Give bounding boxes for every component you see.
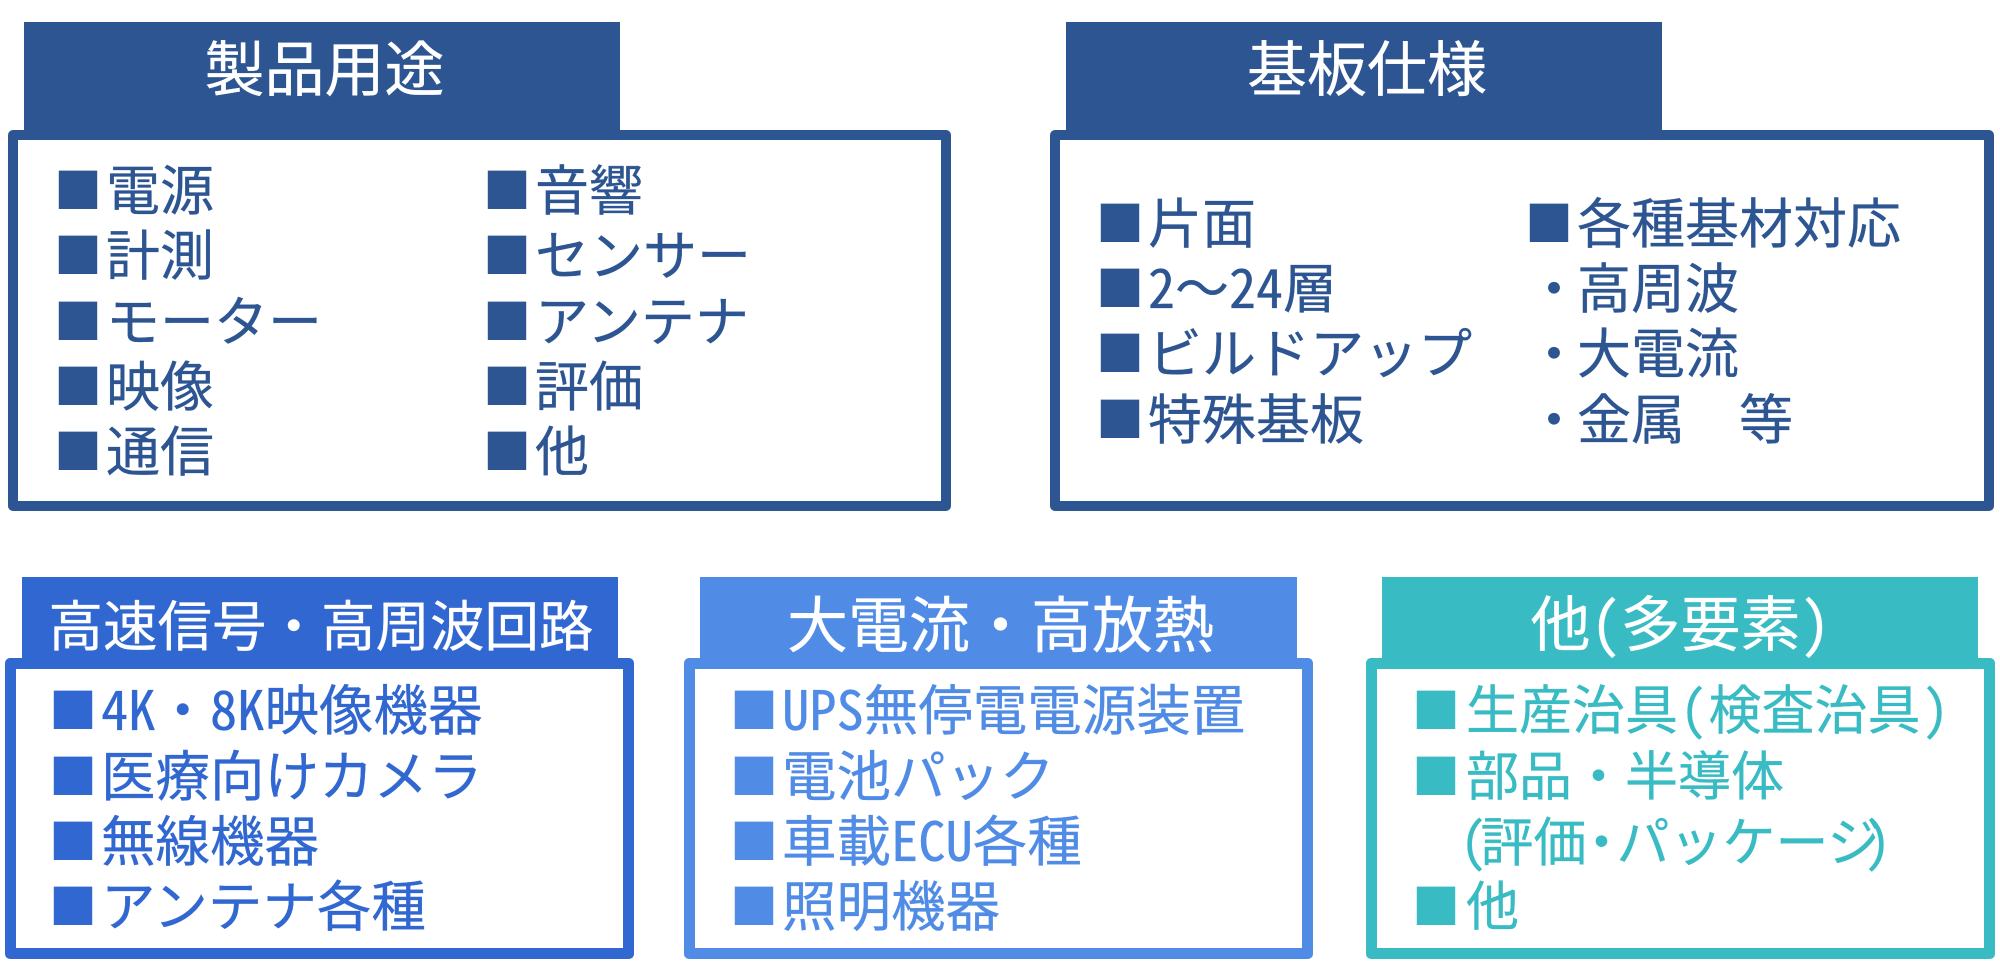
item: 片面: 片面 — [1148, 180, 1256, 259]
item: 生産治具(検査治具): 生産治具(検査治具) — [1466, 669, 1949, 745]
item: 電池パック: ■ — [730, 738, 778, 808]
item: 4K・8K映像機器: ■ — [49, 672, 97, 742]
item: 電池パック: 電池パック — [782, 733, 1055, 812]
item: 評価 — [483, 343, 643, 422]
item: 照明機器: ■ — [730, 868, 778, 938]
item: 映像: ■ — [54, 348, 102, 418]
item: 映像 — [54, 343, 214, 422]
item: 他: ■ — [483, 413, 531, 483]
item: アンテナ各種: アンテナ各種 — [101, 863, 426, 942]
item: 高周波: 高周波 — [1577, 245, 1739, 324]
item: 部品・半導体(評価・パッケージ) — [1412, 735, 1891, 877]
panel: 製品用途 — [8, 22, 951, 511]
panel: 高速信号・高周波回路 — [5, 577, 634, 959]
panel: 大電流・高放熱 — [684, 576, 1313, 959]
item: 医療向けカメラ: 医療向けカメラ — [101, 733, 483, 812]
item: 他 — [1412, 865, 1519, 941]
item: 車載ECU各種: ■ — [730, 803, 778, 873]
item: 他: 他 — [1466, 865, 1519, 941]
heading: 製品用途 — [24, 22, 620, 140]
item: 音響: 音響 — [535, 147, 643, 226]
frame — [1366, 658, 1995, 959]
item: 無線機器: 無線機器 — [101, 798, 319, 877]
frame — [1050, 130, 1994, 511]
item: アンテナ: アンテナ — [535, 278, 749, 357]
item: 4K・8K映像機器: 4K・8K映像機器 — [101, 667, 483, 746]
item: 他: 他 — [535, 408, 589, 487]
item: 生産治具(検査治具): ■ — [1412, 672, 1460, 742]
item: アンテナ各種: ■ — [49, 868, 97, 938]
frame — [5, 658, 634, 959]
item: UPS無停電電源装置: UPS無停電電源装置 — [782, 667, 1245, 746]
item: ビルドアップ: ■ — [1096, 315, 1144, 385]
item: 金属 等: 金属 等 — [1577, 376, 1793, 455]
item: 医療向けカメラ: ■ — [49, 738, 97, 808]
item: 電源 — [54, 147, 214, 226]
item: 通信 — [54, 408, 214, 487]
item: 音響 — [483, 147, 643, 226]
item: 電源: 電源 — [106, 147, 214, 226]
item: 2～24層: 2～24層 — [1148, 245, 1337, 324]
item: 金属 等: ・ — [1527, 376, 1581, 455]
item: UPS無停電電源装置: ■ — [730, 672, 778, 742]
item: モーター: ■ — [54, 283, 102, 353]
heading: 他(多要素): 他(多要素) — [1530, 577, 1830, 664]
item: 計測: 計測 — [106, 212, 214, 291]
item: 映像: 映像 — [106, 343, 214, 422]
item: 電源: ■ — [54, 152, 102, 222]
heading: 基板仕様: 基板仕様 — [1247, 22, 1487, 109]
item: 計測: ■ — [54, 217, 102, 287]
item: 車載ECU各種: 車載ECU各種 — [782, 798, 1082, 877]
item: 部品・半導体(評価・パッケージ): 部品・半導体 — [1466, 735, 1784, 811]
item: 片面 — [1096, 180, 1256, 259]
item: モーター: モーター — [106, 278, 322, 357]
item: センサー: センサー — [535, 212, 751, 291]
item: 片面: ■ — [1096, 185, 1144, 255]
item: 高周波: ・ — [1527, 245, 1581, 324]
item: 各種基材対応: ■ — [1525, 185, 1573, 255]
item: 部品・半導体(評価・パッケージ): ■ — [1412, 738, 1460, 808]
item: 2～24層: ■ — [1096, 250, 1144, 320]
item: 照明機器: 照明機器 — [782, 863, 1000, 942]
item: 計測 — [54, 212, 214, 291]
item: 特殊基板: 特殊基板 — [1148, 376, 1364, 455]
item: 特殊基板: ■ — [1096, 381, 1144, 451]
item: 通信: 通信 — [106, 408, 214, 487]
frame — [684, 658, 1313, 959]
panel: 他(多要素) — [1366, 577, 1995, 959]
heading: 製品用途: 製品用途 — [204, 22, 444, 109]
heading: 大電流・高放熱 — [700, 577, 1297, 669]
item: 部品・半導体(評価・パッケージ): (評価・パッケージ) — [1460, 801, 1891, 877]
item: 他 — [483, 408, 589, 487]
item: 大電流: ・ — [1527, 310, 1581, 389]
item: ビルドアップ: ビルドアップ — [1148, 310, 1472, 389]
item: 無線機器: ■ — [49, 803, 97, 873]
item: アンテナ: ■ — [483, 283, 531, 353]
item: 評価: 評価 — [535, 343, 643, 422]
heading: 他(多要素) — [1382, 577, 1978, 669]
item: 各種基材対応: 各種基材対応 — [1577, 180, 1901, 259]
panel: 基板仕様 — [1050, 22, 1994, 511]
item: 他: ■ — [1412, 868, 1460, 938]
item: センサー: ■ — [483, 217, 531, 287]
heading: 高速信号・高周波回路: 高速信号・高周波回路 — [48, 583, 594, 662]
item: 通信: ■ — [54, 413, 102, 483]
item: 評価: ■ — [483, 348, 531, 418]
frame — [8, 130, 951, 511]
heading: 基板仕様 — [1066, 22, 1662, 140]
heading: 大電流・高放熱: 大電流・高放熱 — [787, 576, 1214, 665]
item: 音響: ■ — [483, 152, 531, 222]
item: 大電流: 大電流 — [1577, 310, 1739, 389]
